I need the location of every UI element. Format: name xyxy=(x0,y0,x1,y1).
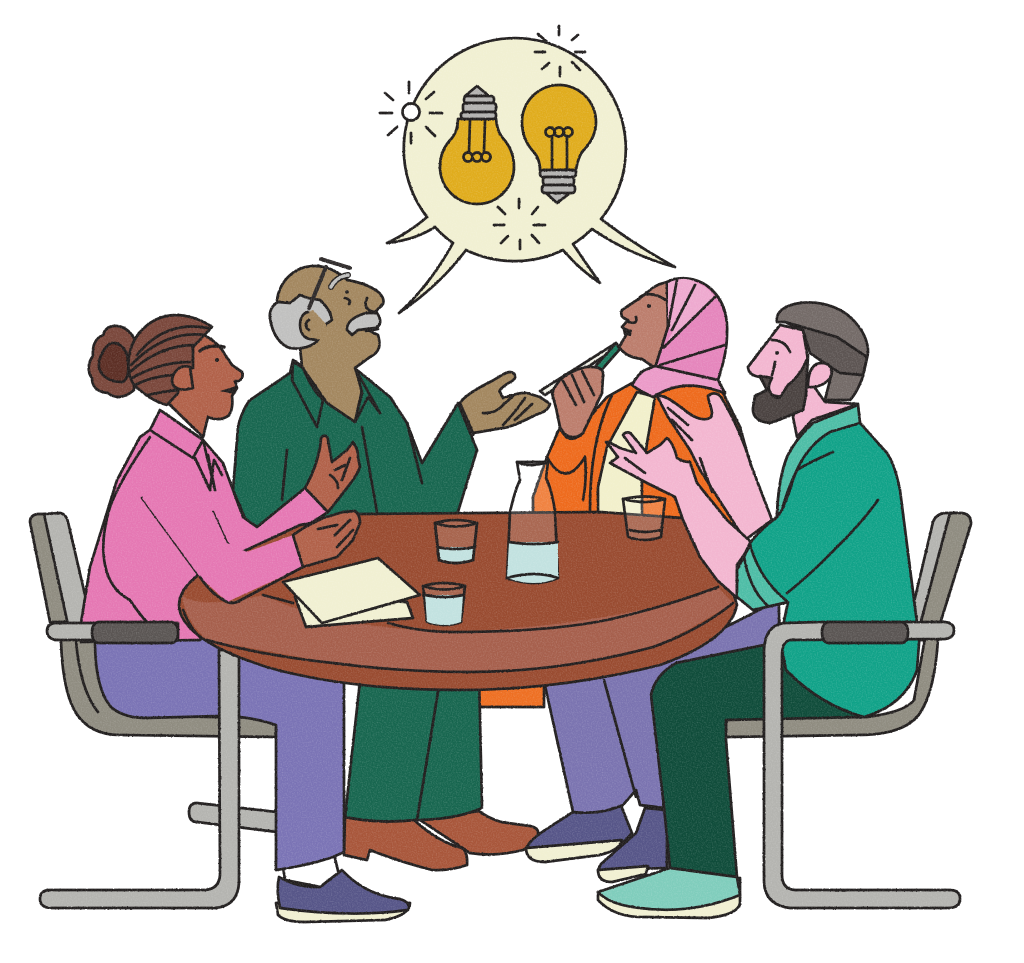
headscarf xyxy=(655,278,727,380)
man four mint shoe xyxy=(598,868,740,918)
teal shirt xyxy=(737,405,920,717)
left chair armrest and front leg xyxy=(40,622,239,908)
glasses xyxy=(309,259,350,308)
woman three trousers and navy shoes xyxy=(526,600,779,882)
rolled cuff xyxy=(737,545,788,610)
icon: top rays xyxy=(535,26,585,76)
water carafe xyxy=(507,462,558,583)
round table xyxy=(179,512,737,690)
bun xyxy=(89,326,135,397)
beard xyxy=(753,355,808,423)
icon: white spark dot with rays xyxy=(380,82,442,143)
right chair armrest and front leg xyxy=(764,622,960,908)
collar xyxy=(777,405,860,517)
man four dark trousers xyxy=(651,645,861,877)
hair xyxy=(777,302,868,400)
raised hand xyxy=(305,436,360,512)
left woman torso and head xyxy=(81,315,360,642)
hand holding pen xyxy=(552,367,603,437)
woman three torso, headscarf and pen xyxy=(533,278,752,525)
collar bow xyxy=(195,440,222,490)
neck xyxy=(793,375,858,437)
neck and face xyxy=(277,266,383,422)
ear xyxy=(300,310,326,340)
moustache xyxy=(347,313,380,335)
man four torso and head xyxy=(737,302,920,717)
pen xyxy=(540,343,618,395)
neck and face xyxy=(167,332,243,437)
open hand xyxy=(460,372,550,433)
orange dress hem xyxy=(479,676,544,707)
water glass front xyxy=(423,583,465,625)
man two torso and head xyxy=(233,259,550,530)
ear xyxy=(172,366,193,390)
paper sheets xyxy=(283,558,420,627)
water glass centre xyxy=(435,520,477,563)
scarf wrap xyxy=(632,366,725,397)
eyebrow and eye xyxy=(331,275,348,287)
bubble outline xyxy=(387,38,675,313)
left woman trousers, sock and shoe xyxy=(95,630,410,922)
face xyxy=(619,282,668,368)
left woman near sleeve and hand xyxy=(142,480,360,603)
icon: unlit bulb xyxy=(440,86,514,204)
pink blouse xyxy=(81,410,328,642)
face xyxy=(748,325,808,400)
left chair crossbar xyxy=(189,803,277,832)
man two trousers and brown shoes xyxy=(344,672,538,870)
left chair back and seat shell xyxy=(30,513,276,737)
back arm xyxy=(657,393,772,540)
man four pink arms and hands xyxy=(606,393,772,598)
green shirt xyxy=(233,360,477,530)
braided hair xyxy=(128,315,212,405)
speech bubble with two light bulbs xyxy=(380,26,675,313)
ear xyxy=(808,363,832,387)
right chair back and seat shell xyxy=(726,513,971,737)
front arm xyxy=(606,432,752,598)
grey hair xyxy=(270,295,332,349)
collar xyxy=(292,362,323,427)
water glass right xyxy=(623,496,665,540)
cream top xyxy=(598,392,655,516)
orange cardigan xyxy=(533,375,752,525)
icon: bottom rays xyxy=(494,199,545,249)
icon: lit bulb xyxy=(522,85,596,203)
